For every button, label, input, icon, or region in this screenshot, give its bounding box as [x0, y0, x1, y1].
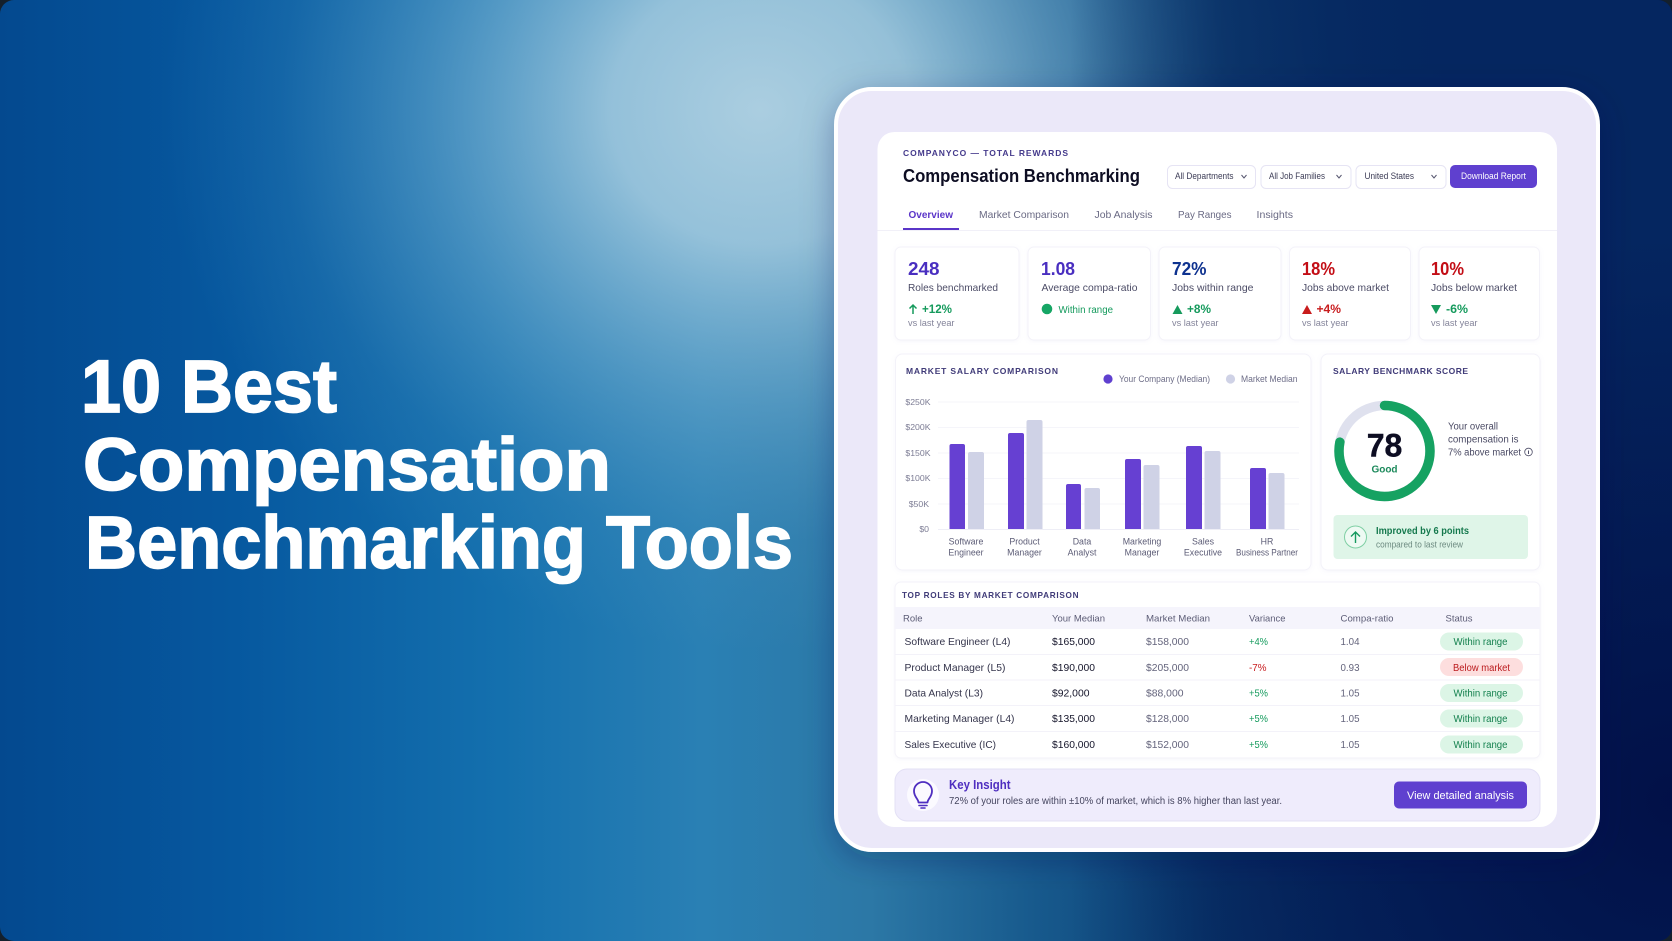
- tabs: Market Comparison: [979, 209, 1069, 221]
- header kicker: COMPANYCO — TOTAL REWARDS: [903, 148, 1068, 158]
- row: data analyst: $88,000: [1146, 688, 1184, 700]
- row: product manager: [904, 658, 1523, 676]
- row: marketing manager: [904, 710, 1523, 728]
- kpi: roles benchmarked: Roles benchmarked: [908, 282, 998, 294]
- kpi: jobs below market: Jobs below market: [1431, 282, 1517, 294]
- row: marketing manager: Marketing Manager (L4): [904, 713, 1014, 725]
- legend: [1103, 374, 1298, 384]
- kpi: roles benchmarked: vs last year: [908, 318, 954, 329]
- callout: key insight: Key Insight: [949, 778, 1011, 792]
- kpi: jobs above market: vs last year: [1302, 318, 1348, 329]
- kpi: jobs above market: 18%: [1302, 259, 1335, 279]
- bar chart: Product: [1009, 536, 1040, 546]
- tabs: Overview: [908, 209, 954, 221]
- improvement callout: Improved by 6 points: [1376, 526, 1469, 537]
- filter: country: United States: [1364, 171, 1414, 181]
- tabs: Insights: [1256, 209, 1293, 221]
- kpi: jobs within range: Jobs within range: [1172, 282, 1254, 294]
- kpi: jobs within range: +8%: [1187, 304, 1211, 316]
- panel: dashboard card: [878, 132, 1557, 827]
- row: sales executive: +5%: [1249, 739, 1268, 751]
- row: marketing manager: +5%: [1249, 713, 1268, 725]
- row: sales executive: Sales Executive (IC): [904, 739, 996, 751]
- bar chart: Sales: [1192, 536, 1215, 546]
- title: Compensation: [83, 423, 611, 506]
- bar chart: HR: [1261, 536, 1273, 546]
- bar chart: Analyst: [1068, 548, 1097, 558]
- score description: [1448, 422, 1532, 458]
- kpi: compa-ratio: [1028, 247, 1150, 340]
- bar chart: $50K: [909, 499, 929, 509]
- dashboard heading: Compensation Benchmarking: [903, 166, 1140, 186]
- kpi: jobs below market: 10%: [1431, 259, 1464, 279]
- row: software engineer: 1.04: [1340, 636, 1360, 648]
- kpi: jobs below market: [1419, 247, 1540, 340]
- kpi: jobs within range: vs last year: [1172, 318, 1218, 329]
- tabs: [903, 209, 1293, 230]
- kpi: jobs within range: [1159, 247, 1281, 340]
- row: data analyst: $92,000: [1052, 688, 1090, 700]
- kpi: jobs above market: +4%: [1316, 304, 1341, 316]
- button: download report: Download Report: [1461, 171, 1526, 181]
- bar chart: $0: [919, 524, 929, 534]
- row: software engineer: [904, 632, 1523, 650]
- legend: Market Median: [1241, 374, 1298, 384]
- table title: TOP ROLES BY MARKET COMPARISON: [902, 591, 1079, 600]
- panel: top roles table: [895, 582, 1540, 758]
- row: data analyst: Data Analyst (L3): [904, 688, 983, 700]
- kpi: jobs within range: 72%: [1172, 259, 1206, 279]
- row: data analyst: Within range: [1454, 688, 1508, 700]
- donut gauge: [1339, 406, 1430, 496]
- callout: key insight: 72% of your roles are within ±10% of market, which is 8% higher than last year.: [949, 796, 1282, 807]
- bar chart: Business Partner: [1236, 548, 1298, 558]
- bar chart: [905, 397, 1299, 558]
- row: sales executive: $160,000: [1052, 739, 1095, 751]
- table header: [895, 607, 1540, 629]
- row: data analyst: [904, 684, 1523, 702]
- panel: salary benchmark score: [1321, 354, 1540, 570]
- button: view detailed analysis: View detailed analysis: [1407, 790, 1514, 802]
- row: sales executive: [904, 736, 1523, 754]
- filter: departments: [1168, 166, 1256, 188]
- tabs: Job Analysis: [1094, 209, 1152, 221]
- row: software engineer: $165,000: [1052, 636, 1095, 648]
- row: marketing manager: Within range: [1454, 714, 1508, 725]
- panel: market salary comparison: [896, 354, 1311, 570]
- table header: Role: [903, 614, 923, 624]
- filter: job families: All Job Families: [1269, 171, 1325, 181]
- title: Benchmarking Tools: [85, 501, 793, 584]
- kpi: compa-ratio: Average compa-ratio: [1042, 282, 1138, 294]
- table header: Compa-ratio: [1340, 614, 1394, 624]
- row: data analyst: +5%: [1249, 688, 1268, 700]
- bar chart: Executive: [1184, 548, 1222, 558]
- score description: compensation is: [1448, 434, 1518, 446]
- kpi: jobs below market: vs last year: [1431, 318, 1478, 329]
- improvement callout: [1334, 515, 1528, 559]
- table header: Status: [1446, 614, 1473, 624]
- bar chart: Software: [949, 536, 983, 546]
- table header: Your Median: [1052, 614, 1105, 624]
- donut gauge: 78: [1367, 428, 1402, 464]
- row: sales executive: $152,000: [1146, 739, 1189, 751]
- row: product manager: $190,000: [1052, 662, 1095, 674]
- panel: tablet frame: [836, 89, 1598, 850]
- button: view detailed analysis: [1394, 782, 1527, 808]
- row: sales executive: 1.05: [1340, 739, 1360, 751]
- row: product manager: 0.93: [1340, 662, 1360, 674]
- bar chart: Engineer: [948, 548, 984, 558]
- table header: Variance: [1249, 614, 1286, 624]
- row: product manager: $205,000: [1146, 662, 1189, 674]
- kpi: roles benchmarked: 248: [908, 259, 940, 279]
- row: software engineer: +4%: [1249, 636, 1268, 648]
- row: product manager: Product Manager (L5): [904, 662, 1006, 674]
- row: software engineer: Software Engineer (L4): [904, 636, 1010, 648]
- filter: country: [1356, 166, 1446, 188]
- row: software engineer: $158,000: [1146, 636, 1189, 648]
- bar chart: Manager: [1007, 548, 1042, 558]
- kpi: jobs below market: -6%: [1446, 304, 1468, 316]
- filter: job families: [1261, 166, 1351, 188]
- kpi: compa-ratio: Within range: [1058, 305, 1113, 316]
- donut gauge: Good: [1371, 464, 1398, 476]
- title: [81, 345, 793, 584]
- improvement callout: compared to last review: [1376, 540, 1463, 550]
- kpi: jobs above market: [1290, 247, 1410, 340]
- tabs: Pay Ranges: [1178, 209, 1232, 221]
- kpi: roles benchmarked: +12%: [922, 304, 952, 316]
- callout: key insight: [895, 769, 1540, 821]
- row: product manager: Below market: [1453, 663, 1510, 674]
- table header: Market Median: [1146, 614, 1210, 624]
- bar chart: $250K: [905, 397, 931, 407]
- kpi: compa-ratio: 1.08: [1041, 259, 1075, 279]
- row: marketing manager: $128,000: [1146, 713, 1189, 725]
- row: marketing manager: $135,000: [1052, 713, 1095, 725]
- icon: light bulb: [907, 779, 939, 811]
- bar chart: $100K: [905, 473, 931, 483]
- button: download report: [1450, 165, 1537, 188]
- score description: Your overall: [1448, 422, 1498, 432]
- row: software engineer: Within range: [1454, 637, 1508, 648]
- bar chart: Manager: [1125, 548, 1159, 558]
- title: 10 Best: [81, 345, 337, 428]
- filter: departments: All Departments: [1175, 171, 1234, 181]
- kpi: roles benchmarked: [895, 247, 1019, 340]
- row: data analyst: 1.05: [1340, 688, 1360, 700]
- legend: Your Company (Median): [1119, 374, 1210, 384]
- row: marketing manager: 1.05: [1340, 713, 1360, 725]
- kpi: jobs above market: Jobs above market: [1302, 282, 1389, 294]
- score title: SALARY BENCHMARK SCORE: [1333, 366, 1468, 376]
- bar chart: Data: [1073, 536, 1091, 546]
- chart title: MARKET SALARY COMPARISON: [906, 366, 1058, 376]
- row: product manager: -7%: [1249, 662, 1266, 674]
- bar chart: Marketing: [1123, 536, 1161, 546]
- bar chart: $150K: [905, 448, 931, 458]
- bar chart: $200K: [905, 422, 931, 432]
- row: sales executive: Within range: [1454, 740, 1508, 751]
- score description: 7% above market: [1448, 448, 1521, 458]
